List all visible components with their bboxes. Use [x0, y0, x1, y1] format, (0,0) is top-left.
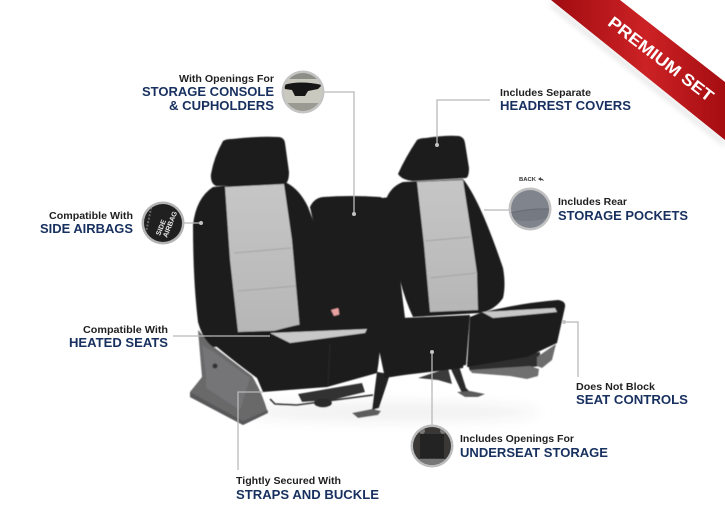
- callout: side airbags: SIDE AIRBAGS: [40, 221, 133, 236]
- callout: side airbags: Compatible With: [49, 210, 133, 222]
- callout: side airbags: [40, 200, 203, 246]
- pink buckles: [331, 308, 341, 316]
- callout: storage console and cupholders: STORAGE CONSOLE: [142, 84, 274, 99]
- callout: headrest covers: [435, 87, 631, 147]
- callout: straps and buckle: Tightly Secured With: [236, 475, 341, 487]
- callout: rear storage pockets: [484, 177, 688, 231]
- callout: straps and buckle: [236, 392, 379, 502]
- callout: headrest covers: Includes Separate: [500, 87, 591, 99]
- callout: storage console and cupholders: [142, 70, 356, 216]
- callout: side airbags: AIRBAG: [162, 210, 179, 239]
- metal rails and legs: [270, 344, 556, 418]
- callout: headrest covers: HEADREST COVERS: [500, 98, 631, 113]
- seat illustration: [190, 136, 565, 425]
- gray plastic base: [190, 330, 268, 425]
- callout: side airbags: SIDE: [155, 219, 168, 237]
- left seat: [193, 137, 380, 392]
- callout: heated seats: [69, 324, 270, 350]
- callout: heated seats: Compatible With: [83, 324, 168, 336]
- callout: seat controls: [562, 320, 688, 407]
- callout: underseat storage: UNDERSEAT STORAGE: [460, 445, 608, 460]
- callout: seat controls: Does Not Block: [576, 381, 655, 393]
- callout: heated seats: HEATED SEATS: [69, 335, 168, 350]
- callout: rear storage pockets: STORAGE POCKETS: [558, 208, 688, 223]
- callout: storage console and cupholders: With Openings For: [179, 73, 274, 85]
- callout: storage console and cupholders: & CUPHOLDERS: [169, 98, 274, 113]
- callout: underseat storage: Includes Openings For: [460, 433, 574, 445]
- callout: straps and buckle: STRAPS AND BUCKLE: [236, 487, 379, 502]
- filler between seats: [310, 197, 470, 378]
- middle seat: [310, 196, 469, 377]
- callout: rear storage pockets: Includes Rear: [558, 196, 627, 208]
- premium set ribbon: [551, 0, 725, 146]
- callout: underseat storage: [410, 350, 608, 468]
- right seat: [387, 136, 565, 367]
- callout: seat controls: SEAT CONTROLS: [576, 392, 688, 407]
- back label: BACK: [519, 177, 537, 183]
- premium set ribbon: PREMIUM SET: [604, 13, 717, 106]
